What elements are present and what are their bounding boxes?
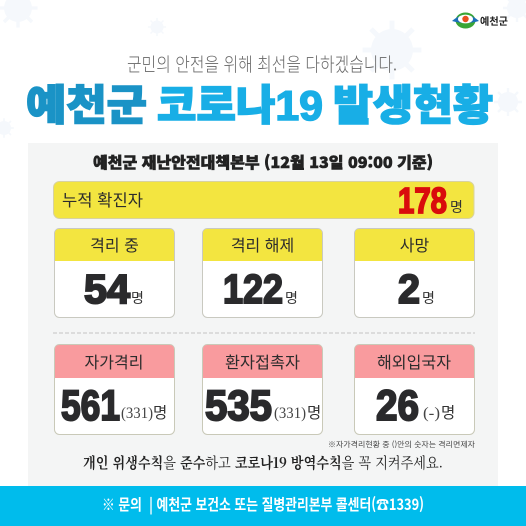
card: patient contacts: 명 [307,401,321,423]
card: in quarantine: 명 [131,288,144,308]
card: released: 격리 해제 [231,232,294,256]
card: self quarantine: 561 [61,382,120,430]
card: overseas arrivals [354,344,474,434]
card: patient contacts: (331) [274,405,306,422]
panel: cumulative confirmed [54,180,474,221]
footer bar: ※ 문의 | 예천군 보건소 또는 질병관리본부 콜센터(☎1339) [102,493,424,515]
panel: cumulative confirmed: 명 [450,197,463,217]
card: in quarantine: 54 [84,266,130,312]
background virus decorations [0,0,526,138]
card: self quarantine: (331) [121,405,153,422]
title: 발생현황 [333,82,493,129]
footnote: ※자가격리현황 중 ()안의 숫자는 격리면제자 [328,439,475,450]
card: released: 122 [223,266,283,312]
panel: cumulative confirmed: 누적 확진자 [62,187,143,211]
card: deaths: 사망 [400,232,429,256]
title: 코로나19 [157,82,323,129]
title: 예천군 [26,82,147,129]
card: overseas arrivals: 해외입국자 [377,349,451,373]
card: patient contacts: 환자접촉자 [225,349,300,373]
card: self quarantine: 자가격리 [84,349,144,373]
card: released [202,228,322,318]
logo: Yecheon-gun [452,12,508,28]
card: released: 명 [285,288,298,308]
card: overseas arrivals: (-) [423,405,440,422]
card: overseas arrivals: 26 [376,382,419,430]
hygiene message: 개인 위생수칙을 준수하고 코로나19 방역수칙을 꼭 지켜주세요. [83,452,443,473]
card: patient contacts [202,344,322,434]
card: deaths: 2 [398,266,420,312]
card: self quarantine: 명 [153,401,167,423]
card: deaths [354,228,474,318]
subtitle: 군민의 안전을 위해 최선을 다하겠습니다. [127,50,397,77]
card: deaths: 명 [422,288,435,308]
footer bar [0,486,526,526]
panel: status background [28,143,498,486]
panel heading: 예천군 재난안전대책본부 (12월 13일 09:00 기준) [93,151,433,173]
card: in quarantine: 격리 중 [90,232,139,256]
title [26,82,493,129]
card: self quarantine [54,344,174,434]
card: overseas arrivals: 명 [441,401,455,423]
panel: cumulative confirmed: 178 [398,180,447,221]
logo: Yecheon-gun: 예천군 [480,13,508,28]
card: in quarantine [54,228,174,318]
card: patient contacts: 535 [205,382,272,430]
